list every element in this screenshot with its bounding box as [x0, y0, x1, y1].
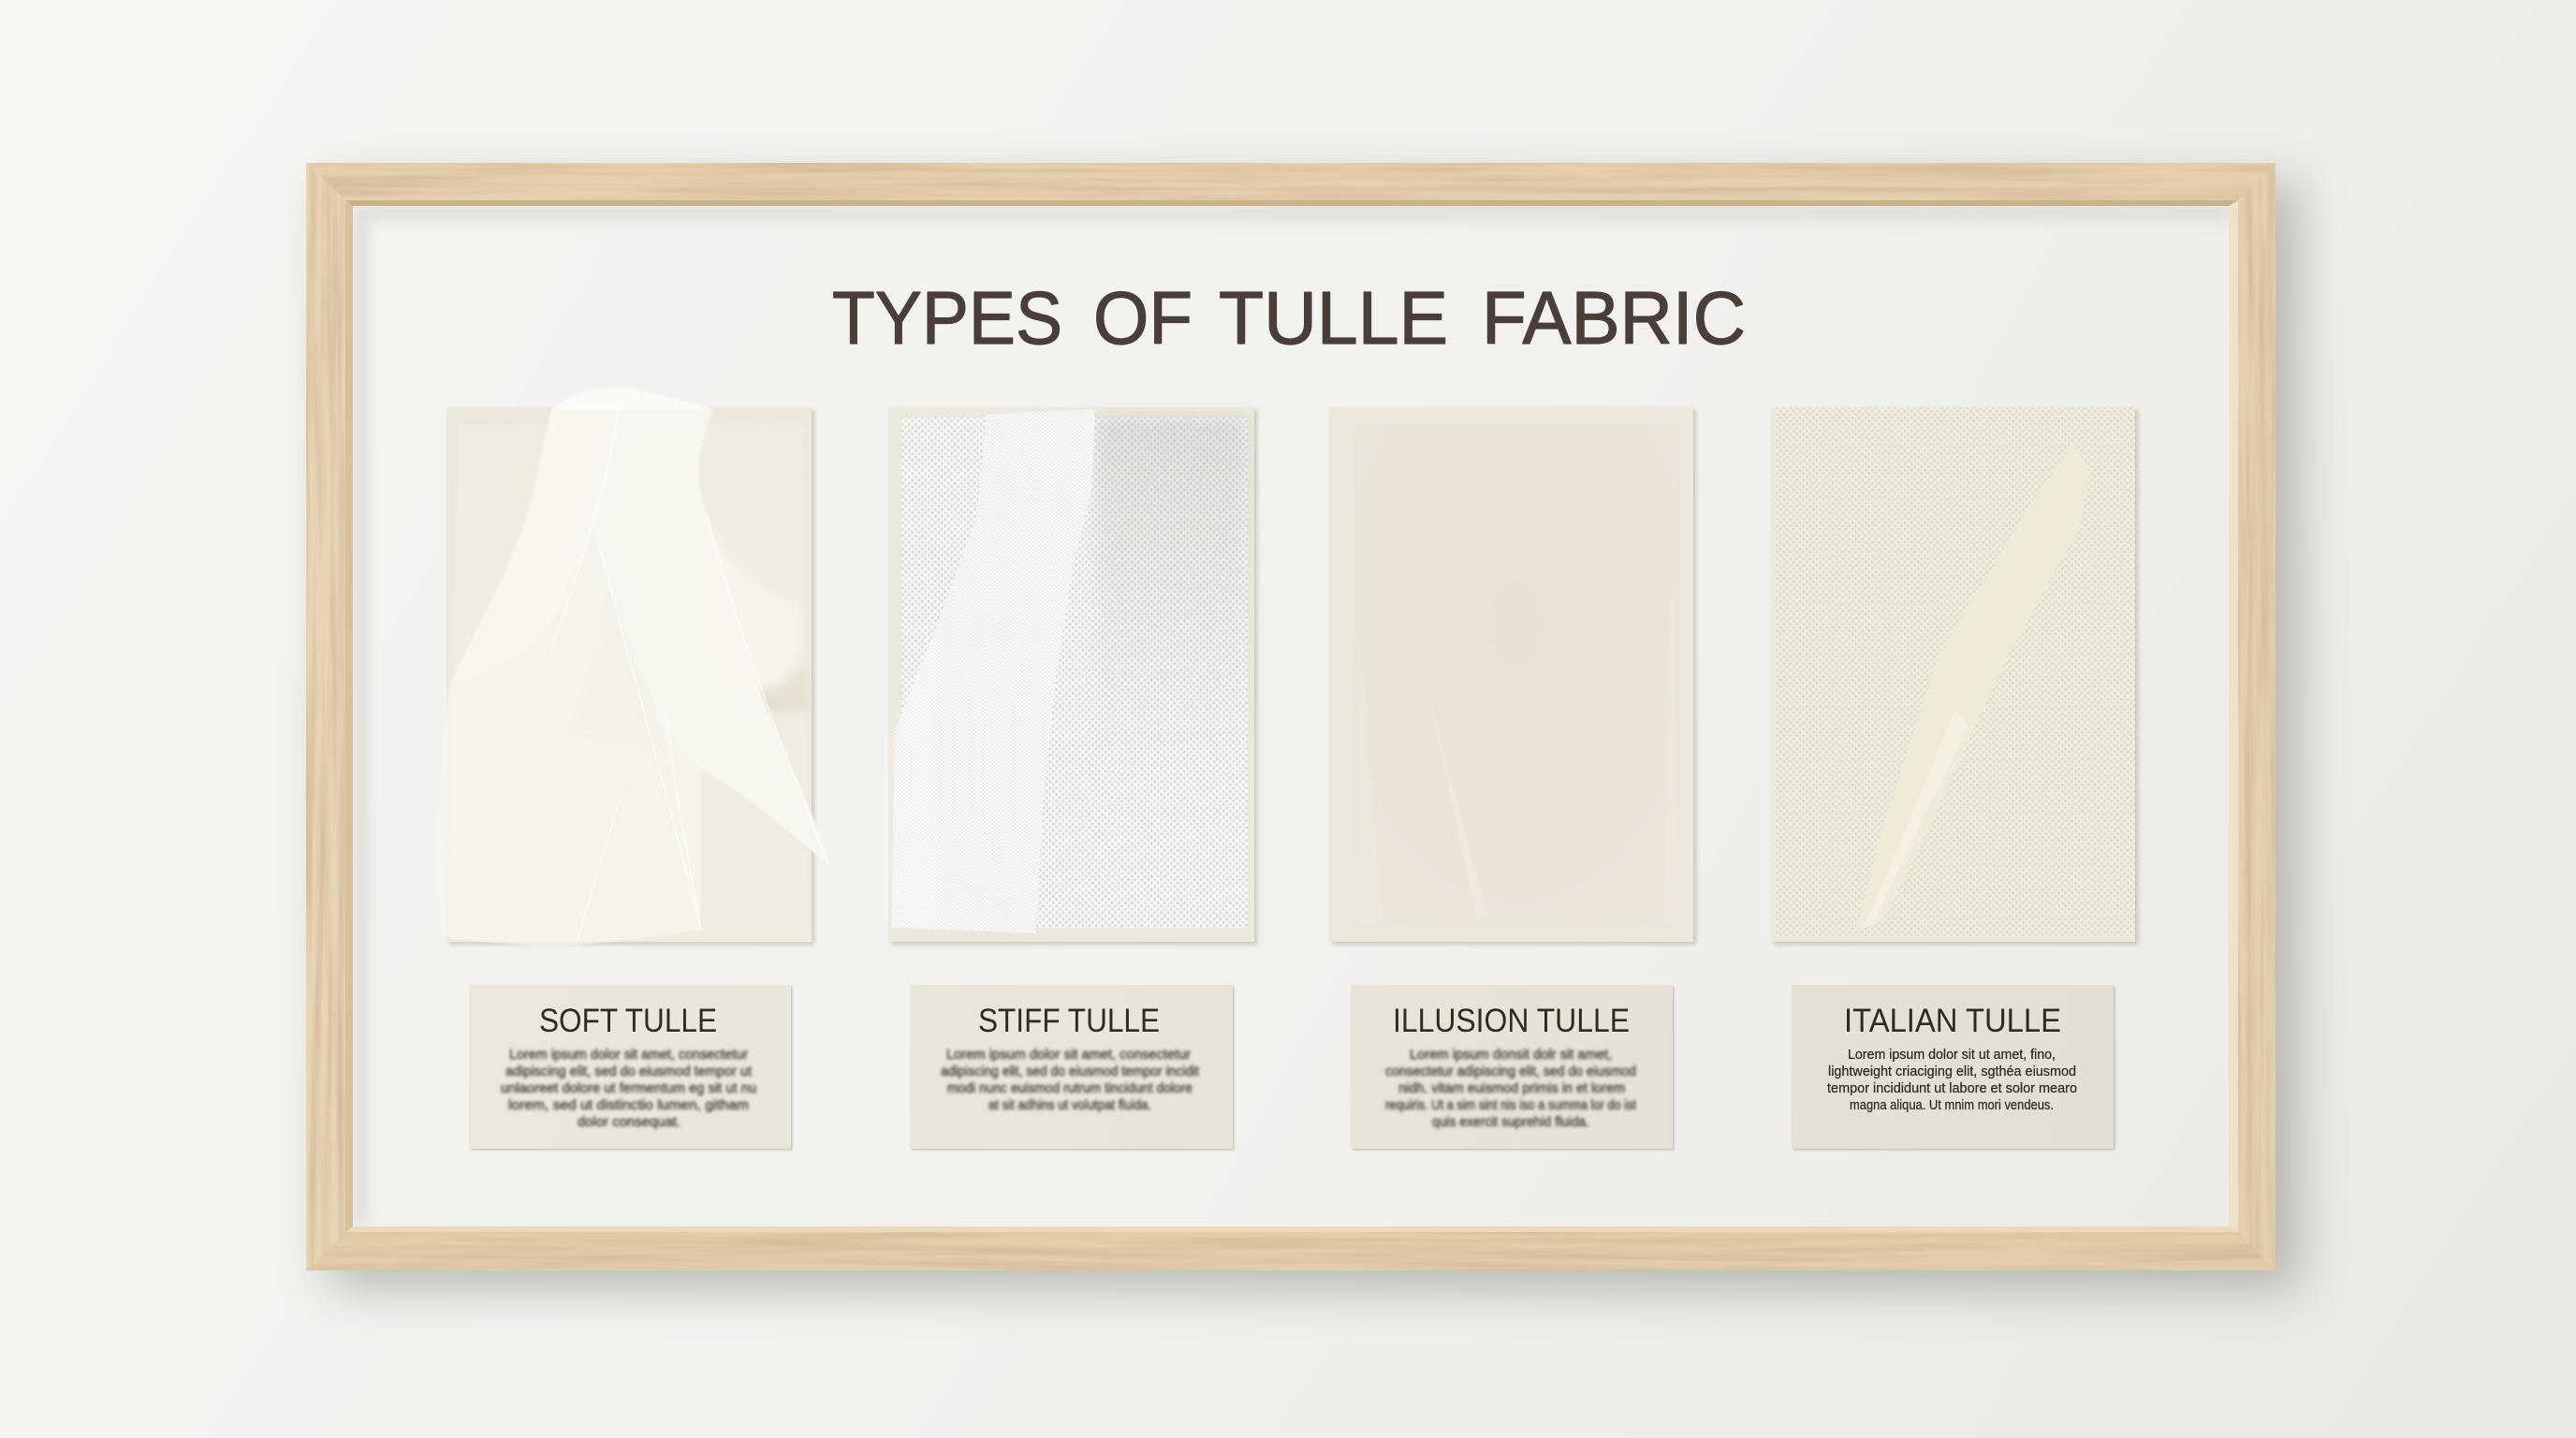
backing card [446, 407, 812, 942]
card body text: quis exercit suprehid fluida. [1432, 1114, 1589, 1130]
card background [1351, 985, 1673, 1149]
frame rail: right [2238, 163, 2276, 1270]
card body text [501, 1047, 756, 1130]
label card: italian tulle [1792, 985, 2115, 1150]
inner rabbet: left [345, 200, 353, 1232]
card body text: consectetur adipiscing elit, sed do eiusmod [1385, 1064, 1636, 1079]
card body text: tempor incididunt ut labore et solor mearo [1827, 1080, 2077, 1096]
swatch shadow [449, 410, 814, 945]
card background [910, 985, 1233, 1149]
title: TULLE [1219, 276, 1448, 360]
soft fabric drape [438, 388, 829, 946]
card body text: Lorem ipsum dolor sit amet, consectetur [946, 1047, 1191, 1063]
frame rail: top [306, 163, 2276, 200]
card body text: nidh. vitam euismod primis in et lorem [1398, 1080, 1625, 1096]
inner rabbet: right [2229, 200, 2238, 1232]
frame rail: left [306, 163, 345, 1270]
card body text [941, 1047, 1200, 1113]
wooden frame [306, 163, 2276, 1270]
mat board [353, 204, 2231, 1228]
card body text: unlaoreet dolore ut fermentum eg sit ut nu [501, 1080, 756, 1096]
card background [469, 985, 791, 1149]
card body text: lorem, sed ut distinctio lumen, githam [508, 1097, 749, 1113]
card shadow [912, 987, 1234, 1150]
panel: soft tulle swatch [438, 388, 829, 946]
card body text: modi nunc euismod rutrum tincidunt dolore [947, 1080, 1193, 1096]
inner rabbet: top [345, 200, 2238, 206]
sheer inner layer [1354, 422, 1679, 928]
card body text [1385, 1047, 1637, 1130]
stiff mesh [901, 418, 1248, 928]
panel: stiff tulle swatch [888, 407, 1257, 945]
stiff fold [891, 409, 1095, 933]
title: TYPES [832, 276, 1062, 360]
card shadow [1353, 987, 1674, 1150]
inner mat shadow [353, 206, 2231, 1226]
swatch shadow [891, 410, 1257, 945]
backing card [1771, 407, 2135, 942]
card shadow [471, 987, 792, 1150]
card body text: magna aliqua. Ut mnim mori vendeus. [1850, 1097, 2054, 1113]
card body text: at sit adhins ut volutpat fluida. [988, 1097, 1151, 1113]
card body text: requiris. Ut a sim sint nis iso a summa lor do ist [1385, 1097, 1637, 1113]
backing card [1329, 407, 1693, 942]
italian fold [1856, 441, 2089, 931]
card body text: Lorem ipsum dolor sit amet, consectetur [509, 1047, 748, 1063]
card body text: lightweight criaciging elit, sgthéa eiusmod [1828, 1064, 2076, 1079]
card body text: Lorem ipsum donsit dolr sit amet, [1410, 1047, 1612, 1063]
title: OF [1093, 276, 1193, 360]
card heading: STIFF TULLE [978, 1003, 1160, 1039]
card heading: SOFT TULLE [539, 1003, 717, 1039]
card body text: adipiscing elit, sed do eiusmod tempor incidit [941, 1064, 1200, 1079]
label card: illusion tulle [1351, 985, 1674, 1150]
italian mesh [1775, 407, 2135, 936]
card heading: ILLUSION TULLE [1393, 1003, 1630, 1039]
card heading: ITALIAN TULLE [1844, 1003, 2061, 1039]
frame rail: bottom [306, 1232, 2276, 1270]
card background [1792, 985, 2114, 1149]
fold shadow [1095, 418, 1248, 755]
card body text: Lorem ipsum dolor sit ut amet, fino, [1848, 1047, 2056, 1063]
panel: italian tulle swatch [1771, 407, 2138, 945]
card body text: dolor consequat. [578, 1114, 681, 1130]
frame cast shadow [328, 183, 2298, 1289]
swatch shadow [1332, 410, 1696, 945]
panel: illusion tulle swatch [1329, 407, 1696, 945]
title: FABRIC [1482, 276, 1746, 360]
inner rabbet: bottom [345, 1226, 2238, 1232]
swatch shadow [1774, 410, 2138, 945]
backing card [888, 407, 1254, 942]
card shadow [1793, 987, 2115, 1150]
sheer fold [1357, 549, 1679, 925]
label card: stiff tulle [910, 985, 1234, 1150]
card body text: adipiscing elit, sed do eiusmod tempor ut [505, 1064, 753, 1079]
label card: soft tulle [469, 985, 792, 1150]
card body text [1827, 1047, 2077, 1113]
